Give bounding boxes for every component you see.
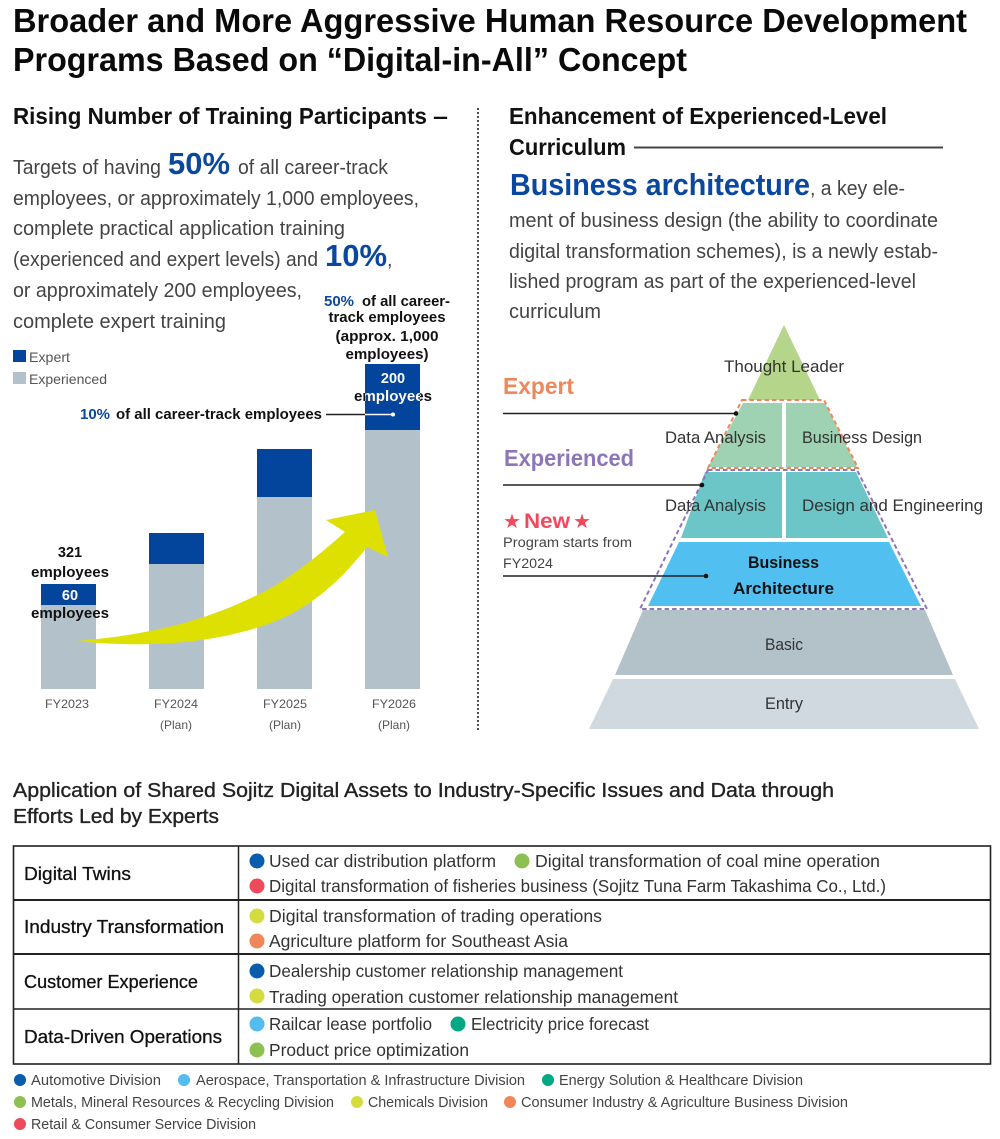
tier: experienced data analysis <box>681 472 782 538</box>
chart legend <box>13 349 107 387</box>
row: data-driven operations: Railcar lease portfolio <box>269 1014 432 1034</box>
text block: training targets: Targets of having <box>13 157 161 179</box>
tier: experienced design and engineering <box>786 472 888 538</box>
callout: 10% of employees <box>80 407 395 423</box>
legend: divisions: Energy Solution & Healthcare Division <box>559 1073 803 1089</box>
label: new program: Program starts from <box>503 535 632 550</box>
pyramid labels: Design and Engineering <box>802 496 983 515</box>
axis labels: FY2026 <box>372 697 416 711</box>
text block: training targets <box>13 146 419 333</box>
row: digital twins <box>24 851 886 896</box>
pyramid labels: Data Analysis <box>665 496 766 515</box>
axis labels: FY2025 <box>263 697 307 711</box>
heading: rising number of training participants: – <box>433 103 448 129</box>
row: digital twins: Used car distribution platform <box>269 851 496 871</box>
row: data-driven operations: Product price optimization <box>269 1040 469 1060</box>
row: industry transformation: Agriculture platform for Southeast Asia <box>269 931 568 951</box>
bar: FY2024 <box>149 533 204 689</box>
data label: FY2026 total: employees) <box>346 347 429 363</box>
row: industry transformation: Digital transformation of trading operations <box>269 906 602 926</box>
axis labels <box>45 697 416 732</box>
tier: entry <box>589 679 979 729</box>
tier: expert business design <box>786 403 857 467</box>
table: digital assets by theme <box>13 846 991 1064</box>
heading: shared digital assets <box>13 779 834 828</box>
pyramid labels: Entry <box>765 694 803 713</box>
chart legend: Experienced <box>29 371 107 387</box>
axis labels: (Plan) <box>269 718 301 732</box>
label: expert: Expert <box>503 373 574 399</box>
label: experienced: Experienced <box>504 445 634 471</box>
title <box>13 2 967 78</box>
text block: training targets: employees, or approximately 1,000 employees, <box>13 188 419 210</box>
text block: training targets: or approximately 200 employees, <box>13 280 302 302</box>
callout: 10% of employees: 10% <box>80 407 110 423</box>
tier: thought leader <box>748 325 820 400</box>
outline: experienced range <box>640 470 927 609</box>
label: expert <box>503 373 738 416</box>
axis labels: FY2024 <box>154 697 198 711</box>
data label: FY2026 expert <box>354 371 432 405</box>
data label: FY2026 expert: employees <box>354 389 432 405</box>
axis labels: (Plan) <box>378 718 410 732</box>
row: customer experience: Trading operation customer relationship management <box>269 987 678 1007</box>
row: industry transformation <box>24 906 602 951</box>
pyramid labels: Architecture <box>733 579 834 598</box>
outline: expert range <box>708 400 858 468</box>
text block: training targets: complete practical application training <box>13 218 345 240</box>
pyramid labels: Basic <box>765 635 803 654</box>
pyramid labels <box>665 357 983 713</box>
row: digital twins: Digital transformation of fisheries business (Sojitz Tuna Farm Takashima Co., Ltd.) <box>269 876 886 896</box>
panel: training participants <box>13 103 450 732</box>
axis labels: (Plan) <box>160 718 192 732</box>
legend: divisions: Automotive Division <box>31 1073 161 1089</box>
data label: FY2026 expert: employees <box>354 389 432 405</box>
pyramid labels: Data Analysis <box>665 428 766 447</box>
text block: business architecture: Business architecture <box>510 167 810 202</box>
text block: business architecture: , a key ele- <box>810 178 905 200</box>
row: data-driven operations <box>24 1014 649 1060</box>
legend: divisions: Retail & Consumer Service Division <box>31 1117 256 1133</box>
data label: FY2023 total: 321 <box>58 545 82 561</box>
pyramid chart <box>589 325 983 729</box>
legend: divisions: Metals, Mineral Resources & Recycling Division <box>31 1095 334 1111</box>
data label: FY2026 total: 50% <box>324 294 354 310</box>
title: Broader and More Aggressive Human Resource Development <box>13 2 967 39</box>
data label: FY2026 total: (approx. 1,000 <box>336 329 438 345</box>
callout: 10% of employees: of all career-track employees <box>116 407 322 423</box>
heading: enhancement of experienced-level curriculum: Curriculum <box>509 134 626 160</box>
label: new program: New <box>524 510 571 533</box>
bar chart <box>31 294 450 732</box>
data label: FY2023 expert: 60 <box>62 588 78 604</box>
heading: shared digital assets: Application of Shared Sojitz Digital Assets to Industry-Specific Issues and Data through <box>13 779 834 802</box>
text block: training targets: of all career-track <box>238 157 389 179</box>
data label: FY2023 expert <box>31 588 109 622</box>
heading: enhancement of experienced-level curriculum: Enhancement of Experienced-Level <box>509 103 887 129</box>
text block: business architecture: lished program as part of the experienced-level <box>509 271 916 293</box>
bar: FY2026 <box>365 364 420 689</box>
legend: divisions <box>14 1073 848 1133</box>
text block: business architecture <box>509 167 938 323</box>
arrow: rising trend <box>76 510 388 644</box>
heading: shared digital assets: Efforts Led by Experts <box>13 805 219 828</box>
title: Programs Based on “Digital-in-All” Concept <box>13 41 687 78</box>
legend: divisions: Aerospace, Transportation & Infrastructure Division <box>196 1073 525 1089</box>
label: new program: FY2024 <box>503 556 554 571</box>
data label: FY2026 expert: 200 <box>381 371 405 387</box>
text block: training targets: 10% <box>325 238 387 273</box>
panel: experienced-level curriculum <box>503 103 983 729</box>
label: new program: ★ <box>573 511 591 533</box>
text block: business architecture: curriculum <box>509 301 601 323</box>
bar: FY2025 <box>257 449 312 689</box>
label: experienced <box>503 445 704 487</box>
row: customer experience: Customer Experience <box>24 971 198 992</box>
pyramid labels: Thought Leader <box>724 357 844 376</box>
data label: FY2026 total: track employees <box>328 310 446 326</box>
chart legend: Expert <box>29 349 70 365</box>
heading: rising number of training participants: Rising Number of Training Participants <box>13 103 427 129</box>
text block: training targets: complete expert training <box>13 311 226 333</box>
pyramid labels: Business <box>748 553 819 572</box>
pyramid labels: Business Design <box>802 428 922 447</box>
data label: FY2026 total: of all career- <box>362 294 450 310</box>
text block: business architecture: digital transformation schemes), is a newly estab- <box>509 241 938 263</box>
legend: divisions: Chemicals Division <box>368 1095 488 1111</box>
divider <box>477 108 479 732</box>
text block: training targets: (experienced and expert levels) and <box>13 249 318 271</box>
row: digital twins: Digital Twins <box>24 863 131 884</box>
text block: business architecture: ment of business design (the ability to coordinate <box>509 210 938 232</box>
tier: business architecture <box>648 542 921 606</box>
tier: expert data analysis <box>708 403 782 467</box>
data label: FY2026 total <box>324 294 450 363</box>
row: data-driven operations: Data-Driven Operations <box>24 1026 222 1047</box>
label: new program <box>503 510 708 578</box>
label: new program: ★ <box>503 511 521 533</box>
row: data-driven operations: Electricity price forecast <box>471 1014 649 1034</box>
legend: divisions: Consumer Industry & Agriculture Business Division <box>521 1095 848 1111</box>
data label: FY2023 expert: employees <box>31 606 109 622</box>
row: digital twins: Digital transformation of coal mine operation <box>535 851 880 871</box>
heading: enhancement of experienced-level curriculum <box>509 103 943 160</box>
axis labels: FY2023 <box>45 697 89 711</box>
row: customer experience: Dealership customer relationship management <box>269 961 623 981</box>
bar: FY2023 <box>41 584 96 689</box>
tier: basic <box>615 610 953 675</box>
row: industry transformation: Industry Transformation <box>24 916 224 937</box>
text block: training targets: , <box>387 249 393 271</box>
data label: FY2023 employees: employees <box>31 565 109 581</box>
text block: training targets: 50% <box>168 146 230 181</box>
row: customer experience <box>24 961 678 1007</box>
